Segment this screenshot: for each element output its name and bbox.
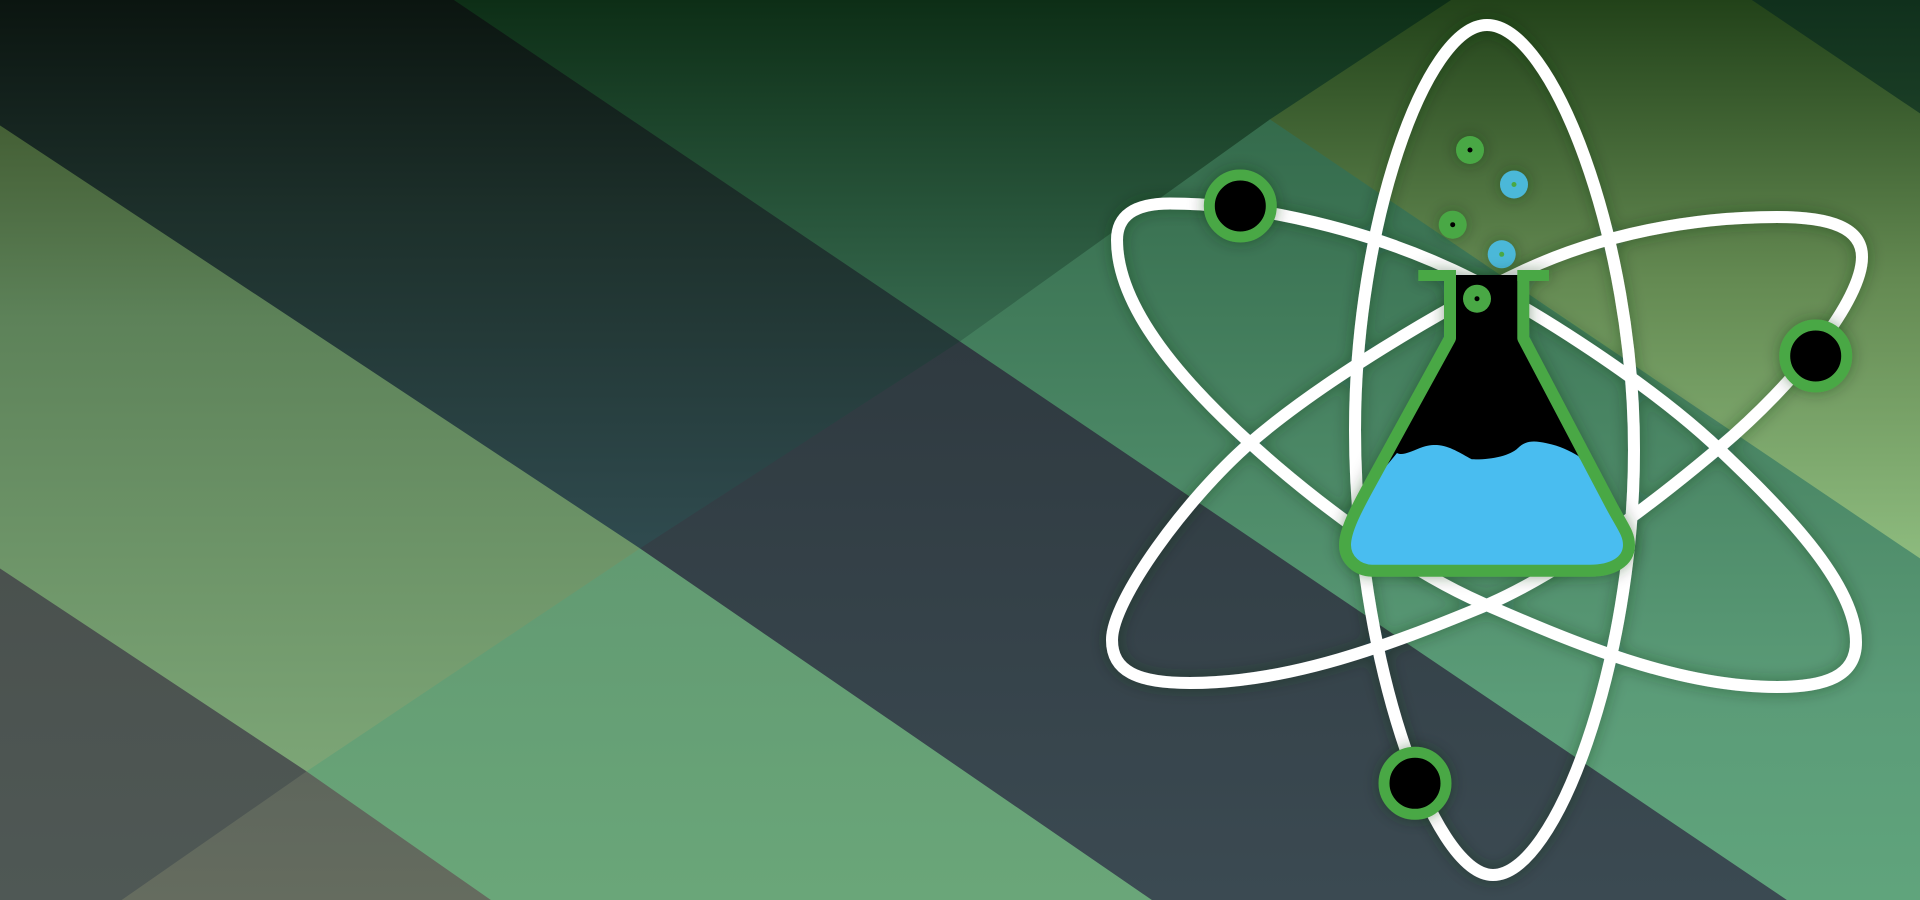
flask interior — [1345, 275, 1629, 571]
atom with flask — [1112, 25, 1862, 875]
flask outline — [1345, 275, 1629, 571]
bubble: green top — [1456, 136, 1484, 164]
flask rim left — [1418, 270, 1456, 281]
flask water — [1345, 441, 1629, 571]
bubble: green middle — [1439, 211, 1467, 239]
electron: upper left — [1209, 175, 1271, 237]
flask — [1345, 270, 1629, 571]
electron: bottom — [1384, 752, 1446, 814]
bubble inside flask — [1463, 285, 1491, 313]
bubble: blue top — [1500, 170, 1528, 198]
flask rim right — [1517, 270, 1549, 281]
atom orbits — [1112, 25, 1862, 875]
bubble: blue lower — [1488, 240, 1516, 268]
electron: right — [1785, 325, 1847, 387]
